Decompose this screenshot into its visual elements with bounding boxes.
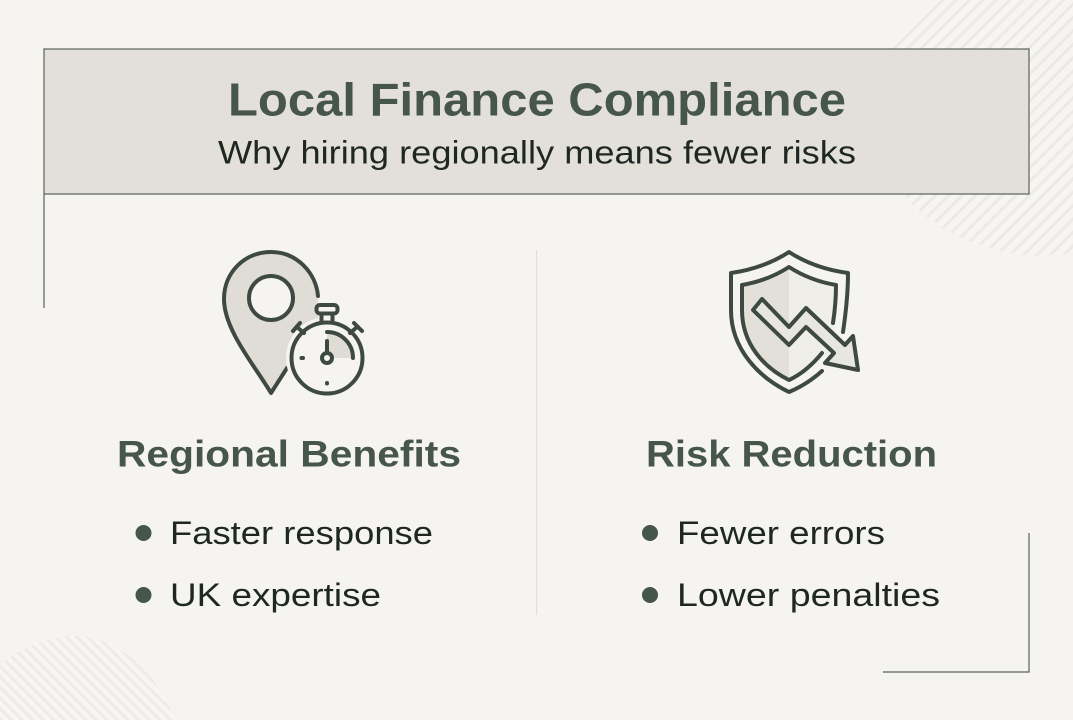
bullet: UK expertise: UK expertise — [170, 577, 381, 613]
icon: shield with downward arrow — [731, 252, 858, 392]
title: Local Finance Compliance — [228, 74, 846, 126]
bottom-right corner frame — [883, 533, 1029, 672]
header panel — [44, 49, 1029, 194]
icon: location pin with stopwatch — [224, 252, 368, 399]
heading: regional benefits: Regional Benefits — [117, 434, 461, 474]
panel: risk reduction — [642, 252, 940, 613]
bullet: lower penalties: Lower penalties — [677, 577, 940, 613]
subtitle: Why hiring regionally means fewer risks — [218, 134, 856, 170]
panel: regional benefits — [117, 252, 461, 613]
heading: risk reduction: Risk Reduction — [646, 434, 937, 474]
bullet: faster response: Faster response — [170, 515, 433, 551]
top-left frame line — [43, 194, 45, 308]
bullet: fewer errors: Fewer errors — [677, 515, 885, 551]
